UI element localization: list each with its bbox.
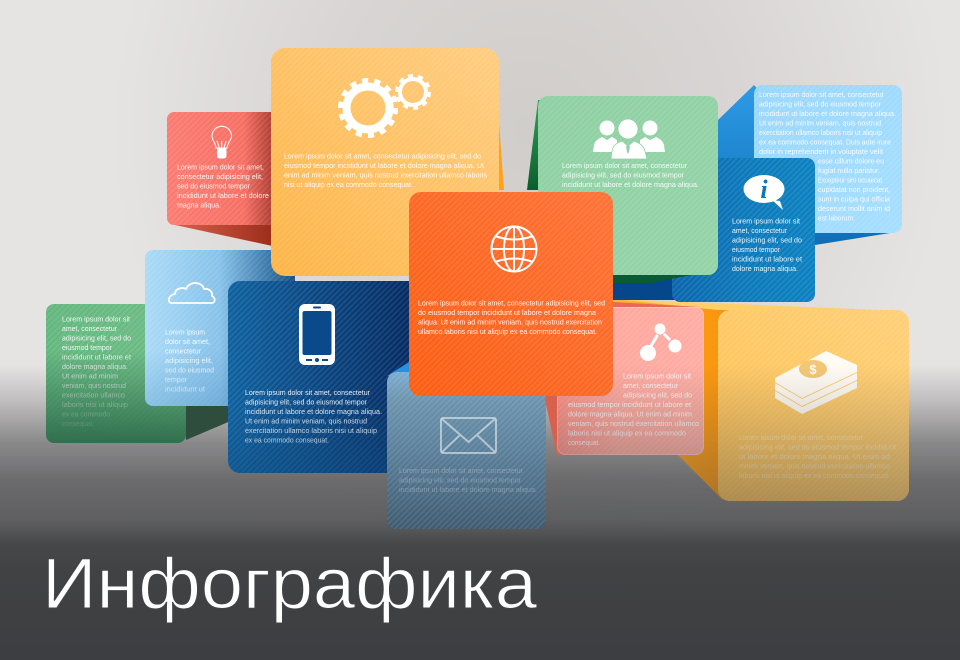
text: molecule: veniam, quis nostrud exercitation ullamco: [568, 419, 699, 428]
text: left green: ex ea commodo: [62, 410, 110, 418]
text: cloud: tempor: [165, 375, 187, 384]
text: cloud: consectetur: [165, 346, 201, 356]
text: left green: dolore magna aliqua.: [62, 362, 128, 371]
text: lightbulb: [177, 162, 269, 210]
text: molecule: [568, 372, 699, 447]
text: cloud: [165, 328, 214, 394]
icon: light bulb: [212, 126, 232, 158]
text: info: amet, consectetur: [732, 226, 787, 235]
text: molecule: dolore magna aliqua. Ut enim ad minim: [568, 410, 692, 419]
text: gears: eiusmod tempor incididunt ut labore et dolore magna aliqua. Ut: [284, 161, 485, 170]
text: info: Lorem ipsum dolor sit: [732, 216, 801, 226]
icon: stack of money: [775, 351, 857, 414]
text: molecule: adipisicing elit, sed do: [623, 391, 692, 400]
text: long: sunt in culpa qui officia: [818, 194, 891, 204]
text: info: incididunt ut labore et: [732, 254, 803, 264]
card: globe (orange, centre): [409, 192, 613, 396]
icon: team of people: [593, 119, 665, 159]
text: team: [562, 161, 699, 189]
text: info: eiusmod tempor: [732, 245, 780, 254]
text: cloud: sed do eiusmod: [165, 366, 214, 374]
text: gears: Lorem ipsum dolor sit amet, consectetur adipisicing elit, sed do: [284, 152, 481, 160]
text: lightbulb: sed do eiusmod tempor: [177, 182, 250, 190]
text: cloud: Lorem ipsum: [165, 328, 205, 336]
text: left green: Lorem ipsum dolor sit: [62, 314, 131, 324]
icon: cloud: [169, 283, 215, 303]
text: lightbulb: Lorem ipsum dolor sit amet,: [177, 162, 264, 172]
text: long: est laborum.: [818, 214, 855, 222]
card: gears (yellow, large): [271, 48, 504, 276]
text: cloud: adipisicing elit,: [165, 356, 213, 365]
card: long text (light blue, top right): [718, 85, 902, 290]
text: long: incididunt ut labore et dolore magna aliqua.: [759, 109, 896, 118]
text: long: Lorem ipsum dolor sit amet, consectetur: [759, 90, 884, 99]
text: left green: eiusmod tempor: [62, 343, 112, 352]
text: left green: amet, consectetur: [62, 324, 117, 333]
text: team: incididunt ut labore et dolore magna aliqua.: [562, 180, 699, 189]
text: left green: Ut enim ad minim: [62, 372, 118, 380]
text: left green: exercitation ullamco: [62, 390, 125, 400]
text: long: [759, 90, 896, 222]
text: phone: [245, 388, 382, 444]
text: long: Excepteur sint occaecat: [818, 176, 883, 184]
text: long: fugiat nulla pariatur.: [818, 166, 880, 175]
text: lightbulb: magna aliqua.: [177, 200, 221, 210]
icon: gears: [341, 76, 429, 135]
text: left green: [62, 314, 132, 428]
text: team: adipisicing elit, sed do eiusmod tempor: [562, 170, 684, 180]
text: molecule: laboris nisi ut aliquip ex ea commodo: [568, 429, 686, 438]
text: globe: do eiusmod tempor incididunt ut labore et dolore magna: [418, 308, 597, 317]
text: long: Ut enim ad minim veniam, quis nostrud: [759, 118, 881, 128]
card: phone (navy): [228, 281, 423, 473]
text: globe: [418, 298, 605, 336]
text: cloud: dolor sit amet,: [165, 337, 210, 346]
text: info: adipisicing elit, sed do: [732, 236, 802, 244]
card: info (blue): [613, 158, 815, 302]
text: money: [739, 433, 897, 480]
text: cloud: incididunt ut: [165, 384, 206, 394]
text: molecule: consequat.: [568, 438, 600, 447]
text: phone: exercitation ullamco laboris nisi ut aliquip: [245, 426, 377, 435]
card: envelope (steel blue): [387, 362, 546, 529]
text: molecule: Lorem ipsum dolor sit: [623, 372, 692, 381]
text: long: ex ea commodo consequat. Duis aute irure: [759, 138, 891, 146]
text: phone: adipisicing elit, sed do eiusmod tempor: [245, 398, 367, 406]
card: lightbulb (red): [167, 112, 277, 247]
text: phone: Ut enim ad minim veniam, quis nostrud: [245, 416, 367, 426]
text: left green: consequat.: [62, 419, 94, 428]
text: globe: aliqua. Ut enim ad minim veniam, quis nostrud exercitation: [418, 318, 602, 326]
text: envelope: adipisicing elit, sed do eiusmod tempor: [399, 476, 521, 484]
icon: stack of money: $: [809, 362, 817, 377]
text: globe: Lorem ipsum dolor sit amet, consectetur adipisicing elit, sed: [418, 298, 605, 308]
icon: envelope: [441, 418, 496, 453]
text: money: Lorem ipsum dolor sit amet, consectetur: [739, 433, 863, 442]
card: left text (green): [46, 304, 240, 443]
card: money (yellow, right): [613, 299, 909, 501]
text: money: minim veniam, quis nostrud exercitation ullamco: [739, 462, 890, 470]
text: team: Lorem ipsum dolor sit amet, consectetur: [562, 161, 687, 170]
text: gears: nisi ut aliquip ex ea commodo consequat.: [284, 180, 413, 189]
text: phone: Lorem ipsum dolor sit amet, consectetur: [245, 388, 370, 397]
text: envelope: [399, 466, 537, 494]
text: lightbulb: consectetur adipisicing elit,: [177, 172, 263, 181]
dark gradient band: [0, 365, 960, 660]
card: team (green): [527, 96, 718, 283]
icon: molecule: [640, 324, 682, 361]
icon: smartphone: [299, 304, 335, 365]
text: money: ut labore et dolore magna aliqua. Ut enim ad: [739, 452, 890, 461]
text: left green: laboris nisi ut aliquip: [62, 400, 128, 409]
text: envelope: Lorem ipsum dolor sit amet, consectetur: [399, 466, 523, 475]
text: phone: ex ea commodo consequat.: [245, 436, 329, 444]
text: molecule: eiusmod tempor incididunt ut labore et: [568, 400, 692, 409]
card: molecule (pink): [545, 300, 704, 455]
text: info: [732, 216, 803, 273]
text: left green: adipisicing elit, sed do: [62, 334, 131, 342]
text: globe: ullamco laboris nisi ut aliquip ex ea commodo consequat.: [418, 327, 597, 336]
text: phone: incididunt ut labore et dolore magna aliqua.: [245, 407, 382, 416]
text: long: cupidatat non proident,: [818, 185, 890, 194]
text: gears: [284, 152, 487, 189]
text: info: dolore magna aliqua.: [732, 264, 798, 273]
text: long: esse cillum dolore eu: [818, 156, 884, 166]
text: left green: veniam, quis nostrud: [62, 381, 126, 390]
text: money: laboris nisi ut aliquip ex ea commodo consequat.: [739, 471, 890, 480]
card: cloud (light blue): [145, 250, 295, 406]
text: molecule: amet, consectetur: [623, 381, 678, 390]
text: long: exercitation ullamco laboris nisi ut aliquip: [759, 128, 882, 137]
text: long: adipisicing elit, sed do eiusmod tempor: [759, 100, 881, 108]
icon: globe: [492, 226, 536, 272]
icon: info speech bubble: i: [760, 175, 768, 204]
text: left green: incididunt ut labore et: [62, 352, 132, 362]
text: long: deserunt mollit anim id: [818, 204, 890, 213]
text: envelope: incididunt ut labore et dolore magna aliqua.: [399, 485, 537, 494]
title: Инфографика: [42, 545, 538, 624]
text: long: dolor in reprehenderit in voluptate velit: [759, 147, 884, 156]
text: gears: enim ad minim veniam, quis nostrud exercitation ullamco laboris: [284, 170, 487, 180]
text: lightbulb: incididunt ut labore et dolore: [177, 191, 269, 200]
text: money: adipisicing elit, sed do eiusmod tempor incididunt: [739, 442, 897, 452]
icon: info speech bubble: [744, 175, 784, 210]
